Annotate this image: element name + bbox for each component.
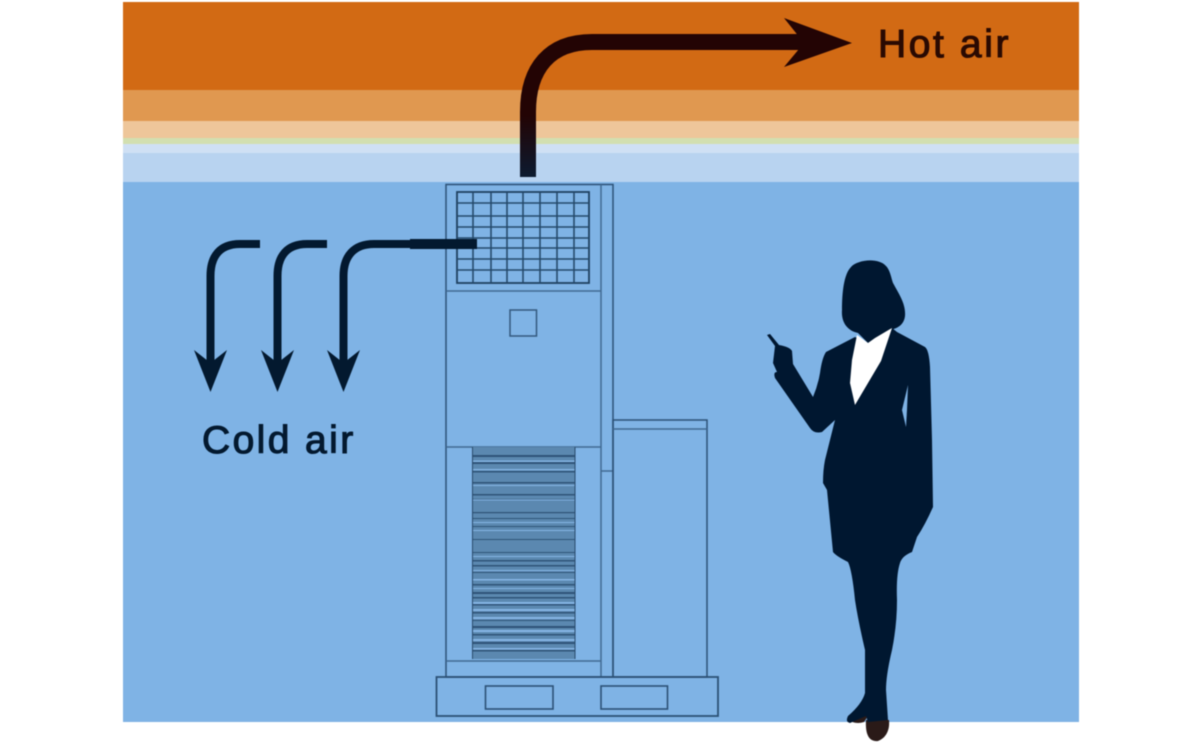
shoes [847,712,889,741]
person silhouette [767,260,933,741]
temperature background bands [123,2,1079,722]
hot air arrow [528,18,852,177]
top intake grille [457,192,589,283]
cold air arrows [194,239,477,392]
gap between arm and torso [902,385,908,427]
body and arm [767,328,933,723]
hair [842,260,905,343]
unit cabinet [446,184,613,677]
label: hot air: Hot air [878,23,1011,66]
side box [613,420,707,677]
air conditioning unit [436,184,718,716]
label: cold air: Cold air [202,419,356,462]
base plinth [436,677,718,716]
cold arrow 2 [261,244,327,392]
cold arrow 3 [327,239,477,392]
control panel square [510,310,536,336]
blouse [850,328,892,405]
lower louvre vent [472,447,575,659]
cold arrow 1 [194,244,260,392]
